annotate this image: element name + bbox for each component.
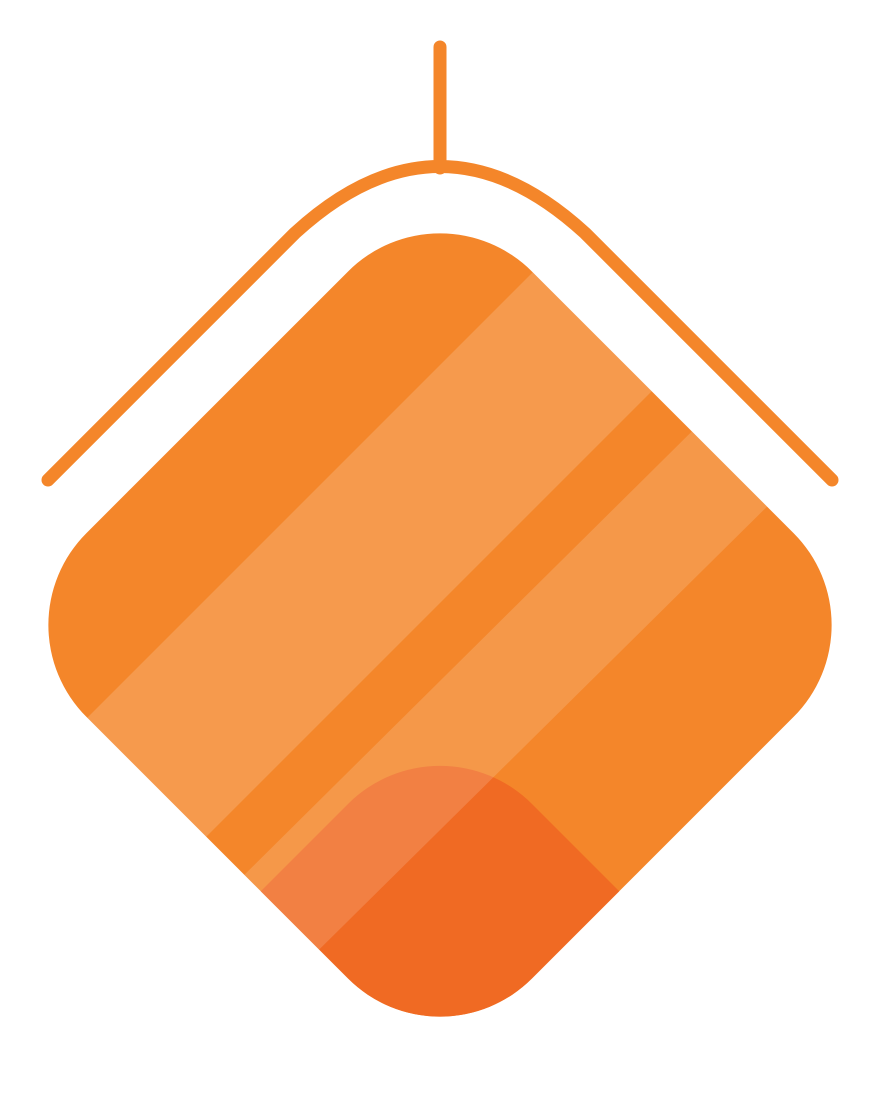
hanger: arched frame [48,166,832,480]
light stripe 2 [244,432,767,950]
light stripe 1 [88,272,652,836]
diamond body with stripes [48,233,832,1017]
hanger: vertical string [434,47,446,168]
bottom bump [260,766,620,1017]
icon: orange hanging diamond sign [42,40,838,1017]
